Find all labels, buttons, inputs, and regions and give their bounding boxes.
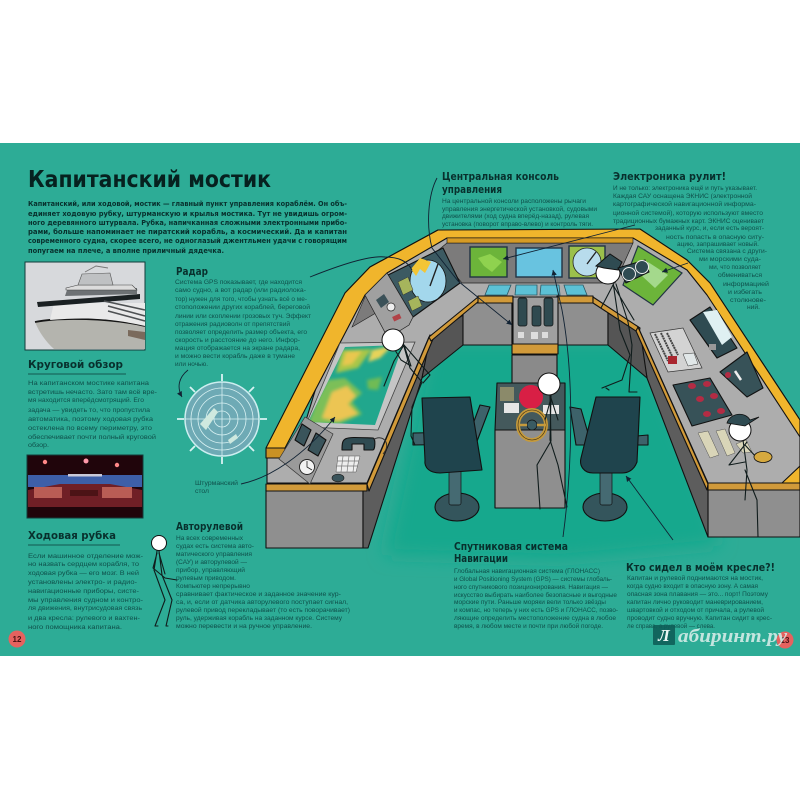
text: авторулевой: судах есть система авто- (176, 543, 254, 550)
label: штурманский стол: Штурманский (195, 479, 238, 487)
heading: спутниковая система: Спутниковая система (454, 541, 568, 553)
console: darker back panel behind screens (436, 243, 633, 283)
text: авторулевой (176, 535, 350, 630)
arrow: chair callout (626, 476, 673, 540)
text: электроника рулит: традиционных бумажных карт. ЭКНИС оценивает (613, 217, 764, 225)
text: круговой обзор: автоматика, поэтому ходовая рубка (28, 415, 153, 423)
watermark: labirint.ru: абиринт.ру (678, 626, 788, 647)
text: электроника рулит: ционной системой), которую используют вместо (613, 209, 763, 217)
arrow: chart table callout (241, 417, 335, 484)
figure: autopilot stick man (152, 536, 177, 626)
text: ходовая рубка: мы управления судном и контро- (28, 597, 143, 604)
text: электроника рулит: и избегать (728, 288, 763, 296)
floor inner teal (385, 340, 720, 560)
heading: центральная консоль: управления (442, 184, 502, 196)
heading: электроника рулит: Электроника рулит! (613, 171, 726, 183)
text: радар: линии или скоплении грозовых туч. Эффект (175, 313, 311, 320)
text: кто сидел в моём кресле: когда судно входит в опасную зону. А самая (627, 583, 758, 590)
text: центральная консоль: установка (поворот вправо-влево) и контроль тяги. (442, 221, 593, 228)
intro text: единяет ходовую рубку, штурманскую и крылья мостика. Тут не увидишь огром- (28, 210, 347, 218)
heading: спутниковая система (454, 541, 568, 565)
text: радар: Система GPS показывает, где находится (175, 279, 302, 286)
arrow: satellite navigation to blue screen (553, 270, 571, 537)
text: центральная консоль (442, 197, 597, 228)
text: электроника рулит: информацией (723, 280, 769, 288)
text: кто сидел в моём кресле: капитан лично руководит маневрированием, (627, 599, 763, 606)
small blue screens (485, 285, 587, 295)
helm desk (495, 383, 565, 508)
controls beside radar (365, 273, 413, 338)
page background panel (0, 143, 800, 656)
text: радар: и можно вести корабль даже в тумане (175, 352, 295, 360)
heading: авторулевой: Авторулевой (176, 521, 243, 533)
text: авторулевой: матического управления (176, 551, 252, 558)
ship wheel (518, 410, 546, 440)
text: авторулевой: рулевым приводом. (176, 575, 236, 582)
text: кто сидел в моём кресле: швартовкой и отходом от причала, а рулевой (627, 606, 764, 614)
text: круговой обзор: встретишь нечасто. Зато там всё вре- (28, 389, 157, 396)
heading: радар: Радар (176, 266, 208, 278)
text: ходовая рубка (28, 553, 143, 631)
text: кто сидел в моём кресле: опасная зона плавания — это... порт! Поэтому (627, 591, 769, 598)
intro text: рами, больше напоминает не пиратский корабль, а космический. Да и капитан (28, 228, 347, 236)
text: электроника рулит: Система связана с други- (687, 248, 767, 255)
text: радар: стоположении других кораблей, береговой (175, 303, 310, 311)
right chair (570, 397, 648, 521)
intro text: попугаем на плече, а вполне приличный дядечка. (28, 247, 224, 255)
page number 12: 12 (13, 635, 22, 644)
text: спутниковая система: время, в любом месте и почти при любой погоде. (454, 622, 603, 630)
text: ходовая рубка: но назвать сердцем корабля, то (28, 560, 139, 568)
photo: cruise ship (25, 262, 145, 350)
stick man: captain with hat and compass (727, 414, 772, 537)
intro text: Капитанский, или ходовой, мостик — главный пункт управления кораблём. Он объ- (28, 200, 347, 208)
text: спутниковая система: морские пути. Раньше моряки вели только звёзды (454, 599, 606, 606)
heading: кто сидел в моём кресле: Кто сидел в моём кресле?! (626, 562, 775, 574)
heading: центральная консоль: Центральная консоль (442, 171, 559, 183)
text: кто сидел в моём кресле: ле справа, а рулевой — слева. (627, 622, 715, 630)
text: электроника рулит: ний. (747, 303, 760, 311)
stick man: helmsman (537, 373, 567, 509)
label: штурманский стол (195, 479, 238, 495)
console: top surface (267, 230, 800, 483)
text: ходовая рубка: установлены электро- и радио- (28, 579, 137, 586)
text: радар: отражения радиоволн от препятствий (175, 320, 290, 328)
text: ходовая рубка: ля движения, внутрисудовая связь (28, 605, 143, 612)
text: электроника рулит: картографической навигационной информа- (613, 200, 756, 208)
text: спутниковая система: Глобальная навигационная система (ГЛОНАСС) (454, 567, 600, 575)
text: спутниковая система: и Global Positioning System (GPS) — системы глобаль- (454, 575, 612, 583)
intro text: современного судна, скорее всего, не одноглазый джентльмен удачи с говорящим (28, 237, 347, 245)
telephone and keypad (332, 437, 387, 482)
left console controls (279, 417, 333, 484)
left chair (413, 397, 490, 521)
text: радар: мация отображается на экране радара, (175, 344, 300, 352)
text: ходовая рубка: навигационные приборы, систе- (28, 587, 139, 595)
text: кто сидел в моём кресле (627, 574, 772, 630)
heading: спутниковая система: Навигации (454, 553, 508, 565)
text: электроника рулит: ацию, запрашивает новый. (677, 240, 759, 248)
text: радар (175, 279, 311, 368)
arrow: radar text to radar icon (179, 370, 188, 397)
intro text (28, 200, 347, 255)
text: радар: позволяет определить размер объекта, его (175, 328, 307, 336)
heading: круговой обзор: Круговой обзор (28, 358, 123, 371)
text: круговой обзор (28, 380, 157, 449)
text: авторулевой: На всех современных (176, 535, 244, 542)
text: авторулевой: (САУ) и авторулевой — (176, 558, 247, 566)
console: back walls (422, 303, 647, 378)
text: спутниковая система: ного спутникового позиционирования. Навигация — (454, 584, 608, 591)
text: радар: само судно, а вот радар (или радиолока- (175, 287, 306, 294)
arrow: electronics to map screen (503, 225, 635, 259)
text: авторулевой: руль, удерживая корабль на заданном курсе. Систему (176, 614, 343, 622)
arrow: central console callout (429, 178, 512, 325)
text: радар: скорость и расстояние до него. Инфор- (175, 337, 300, 344)
arrow: radar callout (310, 257, 412, 277)
text: электроника рулит: ность попасть в опасную ситу- (666, 234, 764, 241)
text: центральная консоль: управления энергетической установкой, судовыми (442, 205, 597, 213)
text: авторулевой: можно перевести и на ручное управление. (176, 623, 312, 630)
console: yellow rim (266, 229, 800, 483)
text: электроника рулит: ми, что позволяет (709, 264, 761, 271)
right console display (690, 307, 737, 358)
radar screen (388, 248, 460, 317)
text: радар: тор) нужен для того, чтобы узнать всё о ме- (175, 295, 307, 303)
text: круговой обзор: остеклена по всему периметру, это (28, 425, 152, 432)
photo: wheelhouse at night (27, 455, 143, 518)
text: спутниковая система (454, 567, 618, 630)
console: left block front (266, 340, 430, 548)
text: круговой обзор: задача — увидеть то, что пропустила (28, 407, 150, 414)
stick man: lookout with binoculars (596, 254, 649, 392)
text: кто сидел в моём кресле: проводит судно вручную. Капитан сидит в крес- (627, 615, 772, 622)
map table (305, 342, 415, 430)
console: darker corner beside left screens (352, 275, 398, 327)
text: ходовая рубка: и два кресла: рулевого и вахтен- (28, 615, 140, 622)
text: спутниковая система: ляющие определить местоположение судна в любое (454, 614, 616, 622)
right console side panel (720, 352, 763, 397)
page number 12 (8, 630, 26, 648)
text: электроника рулит: Каждая САУ оснащена ЭКНИС (электронной (613, 192, 752, 200)
text: электроника рулит: столкнове- (730, 297, 766, 304)
text: ходовая рубка: ходовая рубка — его мозг. В ней (28, 569, 139, 577)
text: авторулевой: сравнивает фактическое и заданное значение кур- (176, 591, 341, 598)
icon: radar scope (177, 374, 267, 464)
console: right block front (638, 330, 800, 537)
text: авторулевой: прибор, управляющий (176, 566, 245, 574)
right console red buttons panel (673, 378, 732, 426)
watermark: labirint.ru: Л (657, 626, 671, 645)
text: электроника рулит (613, 185, 769, 311)
text: ходовая рубка: ного помощника капитана. (28, 624, 122, 631)
watermark: labirint.ru (653, 625, 788, 647)
central console levers (513, 297, 558, 344)
console: central stalk (512, 355, 557, 384)
heading: ходовая рубка: Ходовая рубка (28, 529, 116, 542)
text: ходовая рубка: Если машинное отделение мож- (28, 553, 143, 560)
text: центральная консоль: движителями (ход судна вперёд-назад), рулевая (442, 213, 589, 220)
text: электроника рулит: заданный курс, и, если есть вероят- (655, 224, 764, 232)
right console switch strips (698, 429, 752, 458)
arrow: electronics to right screen (662, 263, 688, 272)
text: авторулевой: са, и, если от датчика авторулевого поступает сигнал, (176, 599, 348, 606)
text: круговой обзор: обеспечивает почти полный круговой (28, 433, 156, 441)
text: спутниковая система: и компас, но теперь у них есть GPS и ГЛОНАСС, позво- (454, 607, 618, 614)
text: центральная консоль: На центральной консоли расположены рычаги (442, 197, 586, 205)
text: круговой обзор: На капитанском мостике капитана (28, 380, 149, 387)
text: кто сидел в моём кресле: Капитан и рулевой поднимаются на мостик, (627, 574, 763, 582)
label: штурманский стол: стол (195, 488, 209, 495)
heading: центральная консоль (442, 171, 559, 196)
title: Капитанский мостик (28, 167, 271, 193)
text: круговой обзор: мя находится вперёдсмотрящий. Его (28, 396, 144, 404)
text: электроника рулит: ми морскими суда- (699, 256, 761, 263)
text: спутниковая система: искусство выбирать наиболее безопасные и выгодные (454, 591, 617, 599)
text: авторулевой: Компьютер непрерывно (176, 583, 250, 590)
text: электроника рулит: обмениваться (718, 271, 762, 279)
text: авторулевой: рулевой привод перекладывает (то есть поворачивает) (176, 606, 350, 614)
text: электроника рулит: И не только: электроника ещё и путь указывает. (613, 185, 757, 192)
stick man: navigator at map (382, 329, 430, 445)
text: радар: или ночью. (175, 361, 208, 368)
top screens (470, 246, 682, 305)
page number 13: 13 (781, 636, 790, 645)
console: front trims (266, 296, 800, 491)
bridge console illustration (241, 178, 800, 560)
page number 13 (776, 632, 794, 648)
intro text: ного деревянного штурвала. Рубка, напичканная сложными электронными прибо- (28, 219, 347, 227)
right console top panel (650, 328, 702, 372)
text: круговой обзор: обзор. (28, 441, 49, 449)
